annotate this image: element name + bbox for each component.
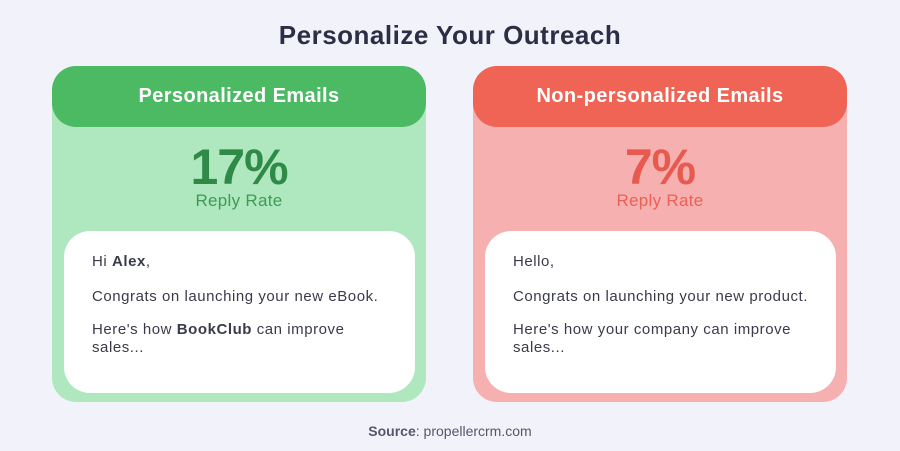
header: personalized [52,66,426,127]
panel: personalized [52,66,426,402]
label: reply rate: Reply Rate [195,191,283,210]
email sample: personalized: Hi Alex, [92,253,151,270]
email sample: personalized: Congrats on launching your new eBook. [92,288,378,305]
header: non-personalized [473,66,847,127]
email sample: personalized: sales... [92,339,144,356]
email sample: generic: sales... [513,339,565,356]
email sample: generic: Congrats on launching your new product. [513,288,808,305]
stat: 7%: 7% [625,139,695,195]
panel: non-personalized [473,66,847,402]
header: personalized: Personalized Emails [138,85,340,107]
source: Source: propellercrm.com [368,423,532,439]
title: Personalize Your Outreach [279,20,621,50]
label: reply rate: Reply Rate [616,191,704,210]
email sample: personalized: Here's how BookClub can improve [92,321,344,338]
email sample: generic: Hello, [513,253,555,270]
stat: 17%: 17% [190,139,288,195]
email sample: generic [485,231,836,393]
email sample: generic: Here's how your company can improve [513,321,791,338]
header: non-personalized: Non-personalized Emails [536,85,784,107]
email sample: personalized [64,231,415,393]
